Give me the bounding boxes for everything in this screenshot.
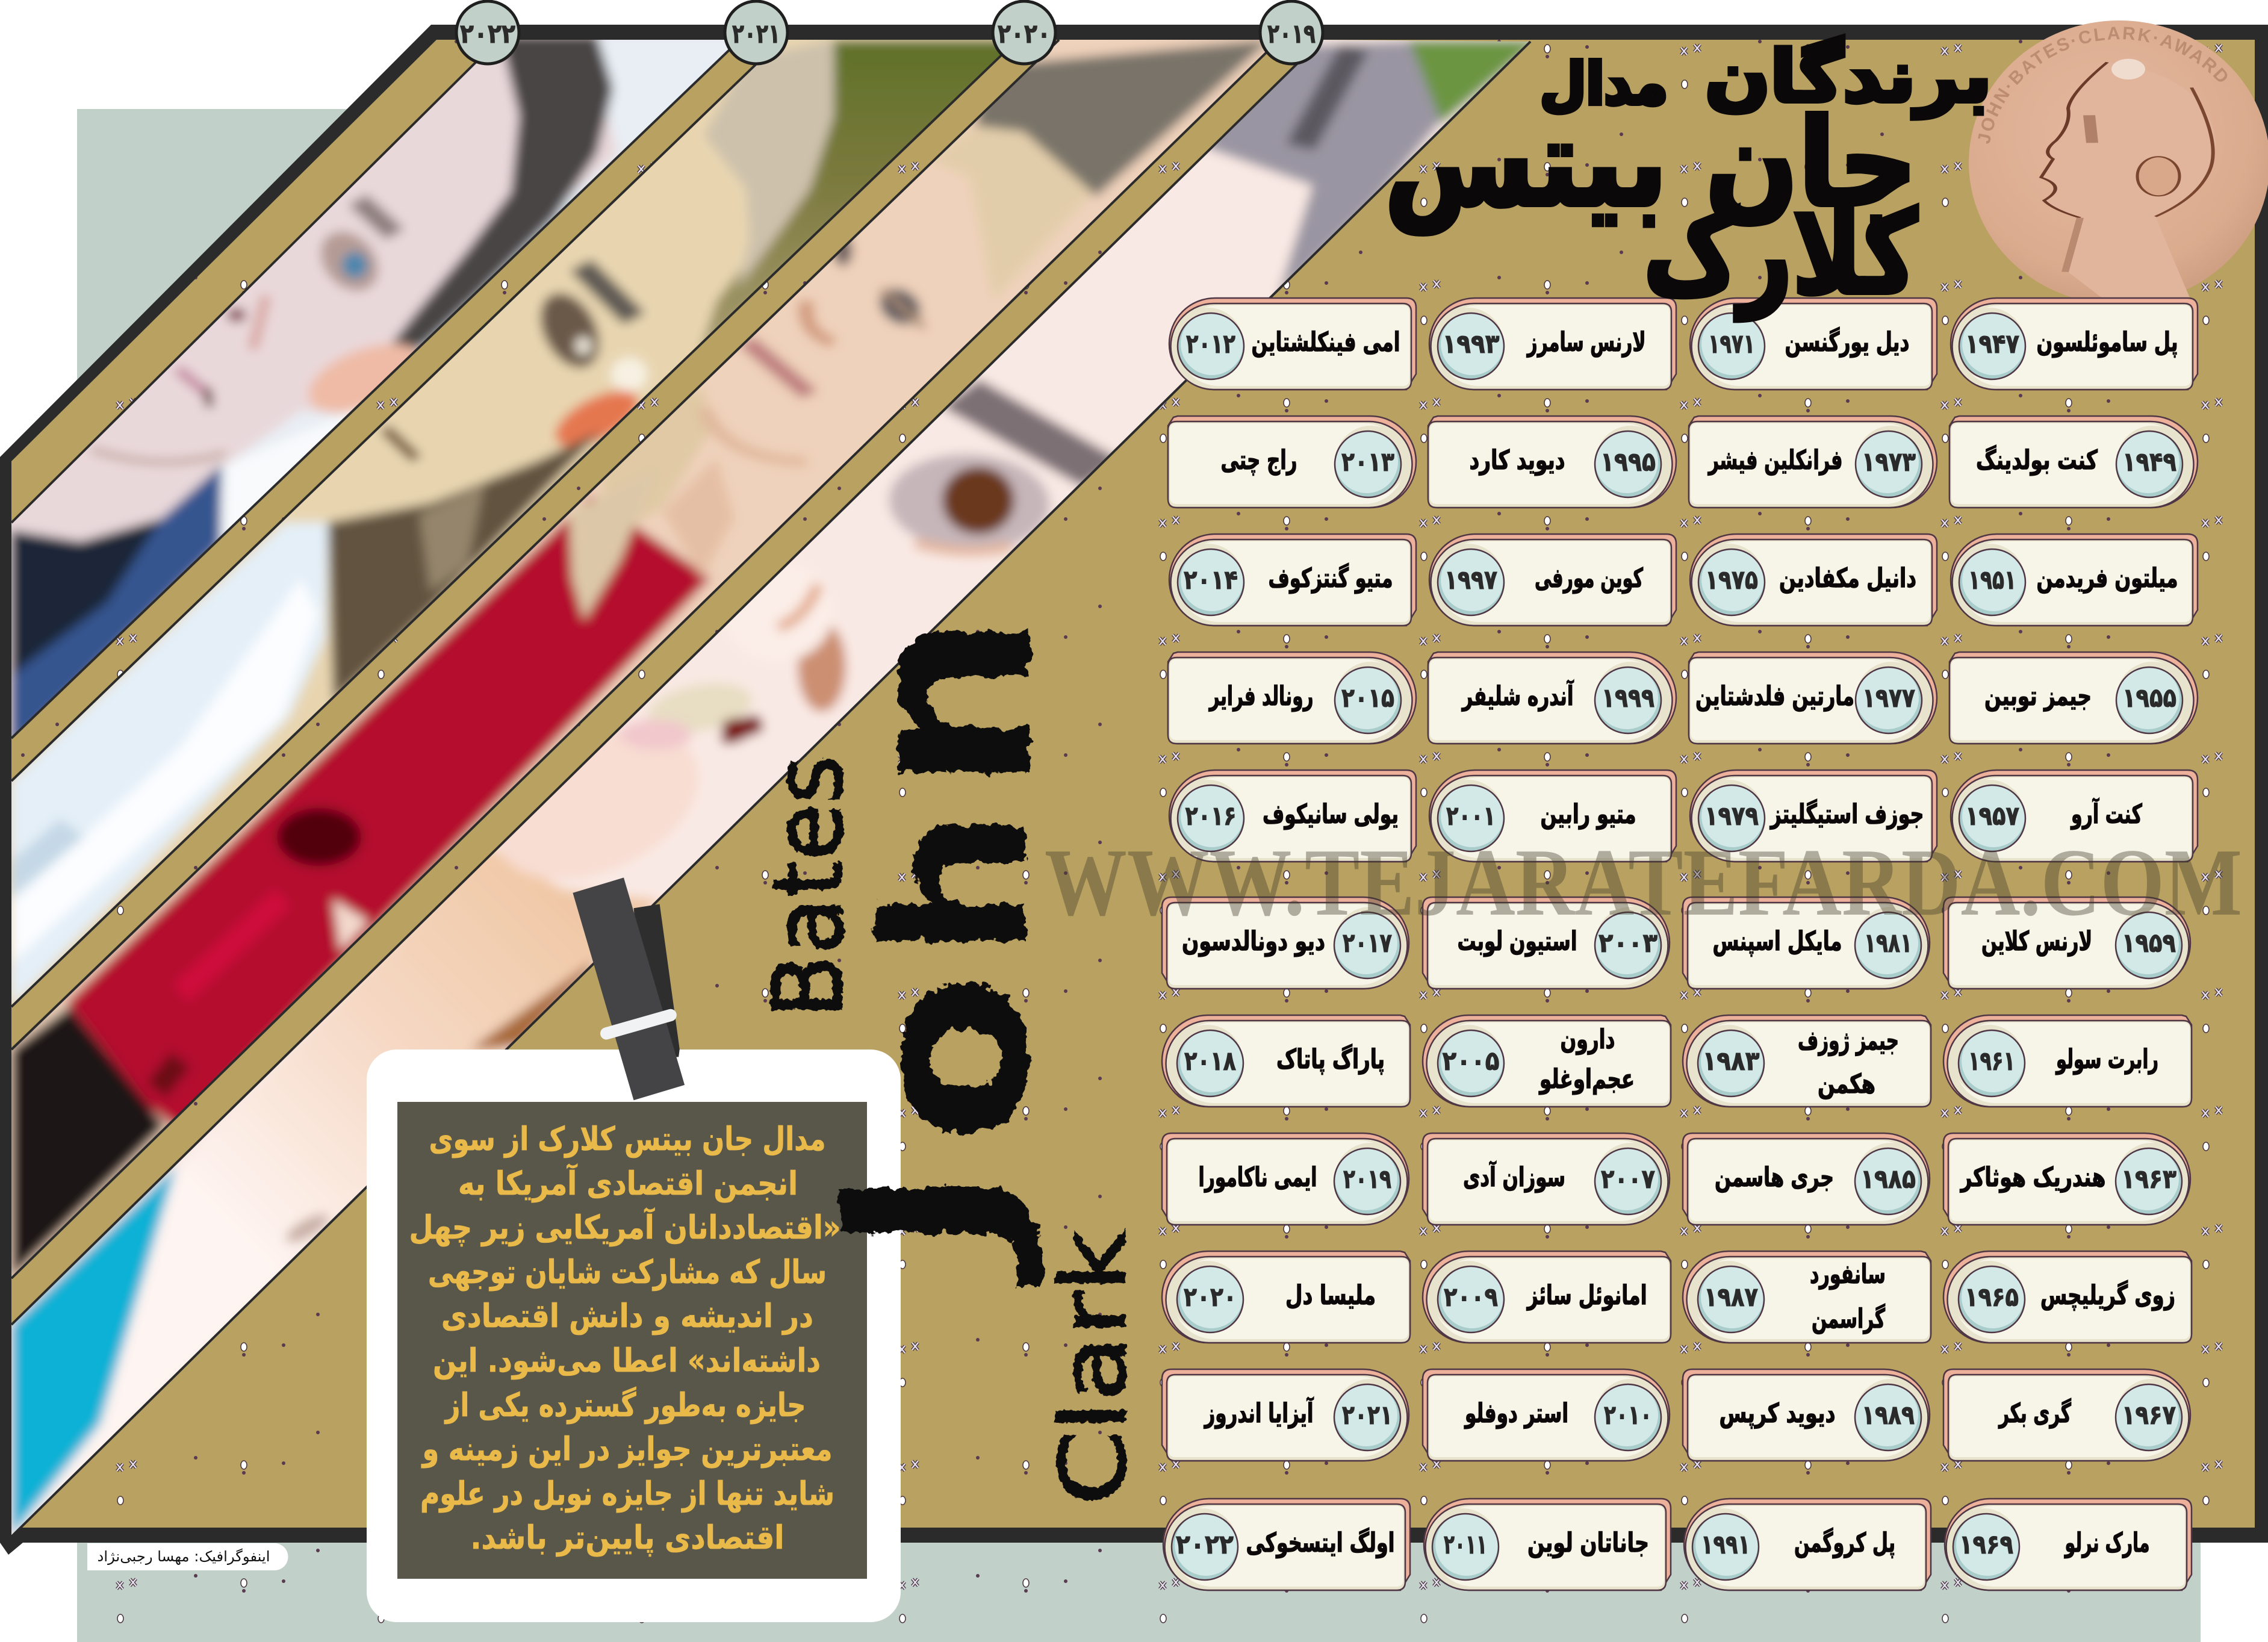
card: Dale Jorgenson 1971: ۱۹۷۱ [1708, 329, 1755, 359]
card: Kevin Murphy 1997: کوین مورفی [1535, 563, 1643, 594]
icon: paper clip holding note [573, 878, 685, 1100]
card: Martin Feldstein 1977: مارتین فلدشتاین [1695, 681, 1854, 712]
card: Gary Becker 1967: ۱۹۶۷ [2122, 1400, 2176, 1431]
card: David Kreps 1989 [1683, 1369, 1930, 1461]
card: Michael Spence 1981: ۱۹۸۱ [1864, 928, 1912, 959]
card: Michael Spence 1981 [1683, 897, 1930, 989]
card: Lawrence Klein 1959 [1943, 897, 2190, 989]
card: Dave Donaldson 2017 [1162, 897, 1409, 989]
card: Yuliy Sannikov 2016 [1169, 770, 1416, 862]
card: Jonathan Levin 2011: جاناتان لوین [1527, 1528, 1649, 1558]
photo strip: winner 2021 [11, 40, 1000, 1005]
card: Dale Jorgenson 1971: دیل یورگنسن [1785, 326, 1910, 358]
card: Emmanuel Saez 2009: امانوئل سائز [1526, 1280, 1647, 1311]
card: Raj Chetty 2013: راج چتی [1221, 445, 1297, 476]
card: Sanford Grossman 1987: گراسمن [1812, 1303, 1885, 1334]
card: Raj Chetty 2013: ۲۰۱۳ [1341, 447, 1394, 477]
card: Emi Nakamura 2019 [1162, 1133, 1409, 1225]
card: Oleg Itskhoki 2022: اولگ ایتسخوکی [1246, 1528, 1394, 1558]
note text: در اندیشه و دانش اقتصادی [441, 1297, 813, 1335]
card: Steven Levitt 2003: ۲۰۰۳ [1598, 928, 1658, 959]
card: Paul Krugman 1991: ۱۹۹۱ [1701, 1529, 1750, 1560]
title: برندگان [1705, 35, 1992, 119]
credit pill [87, 1543, 288, 1570]
card: Hendrik Houthakker 1963 [1943, 1133, 2190, 1225]
card: Lawrence Klein 1959: ۱۹۵۹ [2122, 928, 2176, 959]
card: James Joseph Heckman 1983: ۱۹۸۳ [1703, 1046, 1760, 1077]
card: Lawrence Summers 1993: لارنس سامرز [1526, 327, 1646, 358]
card: Dale Jorgenson 1971 [1690, 298, 1937, 390]
card: Lawrence Summers 1993 [1429, 298, 1676, 390]
year badge 2020 [993, 1, 1055, 64]
card: Jerry Hausman 1985 [1683, 1133, 1930, 1225]
card: Jonathan Levin 2011 [1424, 1499, 1671, 1590]
card: Kevin Murphy 1997 [1429, 534, 1676, 626]
card: Hendrik Houthakker 1963: هندریک هوثاکر [1960, 1162, 2106, 1193]
card: Lawrence Summers 1993: ۱۹۹۳ [1443, 329, 1500, 359]
photo strip: winner 2019 [0, 24, 1565, 1590]
card: James Joseph Heckman 1983: جیمز ژوزف [1798, 1025, 1899, 1056]
card: Kevin Murphy 1997: ۱۹۹۷ [1444, 565, 1497, 596]
note text: سال که مشارکت شایان توجهی [428, 1253, 827, 1291]
card: Amy Finkelstein 2012: ۲۰۱۲ [1186, 329, 1235, 359]
card: Andrei Shleifer 1999: آندره شلیفر [1461, 679, 1574, 712]
card: Joseph Stiglitz 1979 [1690, 770, 1937, 862]
title: کلارک [1644, 187, 1918, 320]
card: Esther Duflo 2010: استر دوفلو [1464, 1398, 1568, 1429]
year badge 2021 [725, 1, 788, 64]
card: Daron Acemoglu 2005: عجم‌اوغلو [1539, 1064, 1635, 1095]
card: Kenneth Arrow 1957: کنت آرو [2071, 797, 2142, 830]
card: Matthew Rabin 2001: متیو رابین [1540, 799, 1636, 830]
card: Kenneth Boulding 1949 [1950, 416, 2198, 508]
card: Joseph Stiglitz 1979: ۱۹۷۹ [1704, 801, 1759, 832]
card: Daron Acemoglu 2005: دارون [1561, 1024, 1615, 1055]
card: Sanford Grossman 1987 [1683, 1251, 1931, 1343]
card: Emmanuel Saez 2009 [1423, 1251, 1671, 1343]
card: Esther Duflo 2010: ۲۰۱۰ [1604, 1400, 1652, 1431]
card: Andrei Shleifer 1999 [1428, 652, 1676, 744]
card: Sanford Grossman 1987: ۱۹۸۷ [1704, 1282, 1758, 1313]
note text: «اقتصاددانان آمریکایی زیر چهل [409, 1207, 840, 1246]
card: Milton Friedman 1951: میلتون فریدمن [2036, 563, 2178, 594]
note text: شاید تنها از جایزه نوبل در علوم [420, 1475, 834, 1513]
card: Oleg Itskhoki 2022: ۲۰۲۲ [1176, 1529, 1234, 1560]
card: David Kreps 1989: ۱۹۸۹ [1862, 1400, 1915, 1431]
photo strip: winner 2020 [0, 24, 1325, 1289]
card: Franklin Fisher 1973: ۱۹۷۳ [1862, 447, 1916, 477]
card: Michael Spence 1981: مایکل اسپنس [1712, 926, 1842, 957]
card: Yuliy Sannikov 2016: ۲۰۱۶ [1185, 801, 1237, 832]
card: Esther Duflo 2010 [1423, 1369, 1670, 1461]
card: Gary Becker 1967: گری بکر [1998, 1398, 2071, 1429]
title: مدال [1540, 51, 1668, 117]
card: Kenneth Arrow 1957: ۱۹۵۷ [1965, 801, 2019, 832]
note text: جایزه به‌طور گسترده یکی از [444, 1386, 806, 1424]
card: Matthew Gentzkow 2014: ۲۰۱۴ [1184, 565, 1238, 596]
rotated name: Bates: Bates [752, 755, 865, 1018]
medal: John Bates Clark [1969, 20, 2268, 297]
card: Roland Fryer 2015 [1168, 652, 1416, 744]
rotated name: Clark: Clark [1042, 1230, 1146, 1505]
card: Kenneth Arrow 1957 [1951, 770, 2198, 862]
card: Susan Athey 2007: ۲۰۰۷ [1601, 1164, 1655, 1195]
card: Zvi Griliches 1965 [1943, 1251, 2192, 1343]
card: Parag Pathak 2018: ۲۰۱۸ [1184, 1046, 1236, 1077]
rotated name: John: n [810, 611, 1084, 794]
rotated name: John: J [801, 1156, 1046, 1287]
card: David Card 1995 [1428, 416, 1676, 508]
card: Andrei Shleifer 1999: ۱۹۹۹ [1602, 683, 1654, 714]
card: Emi Nakamura 2019: ایمی ناکامورا [1198, 1162, 1317, 1193]
year badge 2021: ۲۰۲۱ [732, 19, 780, 49]
card: Hendrik Houthakker 1963: ۱۹۶۳ [2121, 1164, 2176, 1195]
note text: داشته‌اند» اعطا می‌شود. این [433, 1342, 821, 1379]
card: Marc Nerlove 1969: ۱۹۶۹ [1959, 1529, 2013, 1560]
year badge 2020: ۲۰۲۰ [998, 19, 1051, 49]
card: Jonathan Levin 2011: ۲۰۱۱ [1444, 1529, 1487, 1560]
card: Matthew Gentzkow 2014: متیو گنتزکوف [1268, 562, 1393, 594]
card: Sanford Grossman 1987: سانفورد [1810, 1259, 1886, 1290]
card: Matthew Gentzkow 2014 [1169, 534, 1416, 626]
card: Daron Acemoglu 2005 [1423, 1015, 1671, 1107]
rotated name: John [801, 611, 1084, 1287]
scattered marks on sage strip [77, 1543, 2201, 1642]
card: Daron Acemoglu 2005: ۲۰۰۵ [1443, 1046, 1499, 1077]
card: Raj Chetty 2013 [1168, 416, 1416, 508]
card: Robert Solow 1961: ۱۹۶۱ [1968, 1046, 2015, 1077]
card: Lawrence Klein 1959: لارنس کلاین [1981, 926, 2092, 957]
card: James Tobin 1955 [1950, 652, 2198, 744]
note text: معتبرترین جوایز در این زمینه و [421, 1430, 832, 1468]
strip divider lines [11, 40, 1530, 1537]
card: David Kreps 1989: دیوید کرپس [1720, 1398, 1835, 1429]
card: Paul Samuelson 1947 [1951, 298, 2198, 390]
card: Daniel McFadden 1975 [1690, 534, 1937, 626]
card: Paul Krugman 1991 [1684, 1499, 1931, 1590]
note panel [367, 1050, 901, 1622]
card: Dave Donaldson 2017: دیو دونالدسون [1182, 926, 1325, 957]
card: Susan Athey 2007 [1423, 1133, 1670, 1225]
card: Kenneth Boulding 1949: ۱۹۴۹ [2122, 447, 2176, 477]
card: Susan Athey 2007: سوزان آدی [1463, 1160, 1565, 1193]
card: Emi Nakamura 2019: ۲۰۱۹ [1343, 1164, 1391, 1195]
card: Isaiah Andrews 2021: آیزایا اندروز [1204, 1396, 1314, 1429]
card: Marc Nerlove 1969 [1945, 1499, 2192, 1590]
card: Amy Finkelstein 2012: امی فینکلشتاین [1251, 327, 1400, 358]
card: David Card 1995: ۱۹۹۵ [1600, 447, 1656, 477]
card: Isaiah Andrews 2021: ۲۰۲۱ [1342, 1400, 1393, 1431]
rotated name: John: o [820, 973, 1079, 1143]
card: Joseph Stiglitz 1979: جوزف استیگلیتز [1769, 798, 1924, 830]
card: Jerry Hausman 1985: ۱۹۸۵ [1860, 1164, 1916, 1195]
card: Kenneth Boulding 1949: کنت بولدینگ [1976, 445, 2098, 476]
card: Dave Donaldson 2017: ۲۰۱۷ [1343, 928, 1392, 959]
card: James Tobin 1955: جیمز توبین [1984, 681, 2092, 712]
card: Yuliy Sannikov 2016: یولی سانیکوف [1263, 799, 1399, 830]
card: Marc Nerlove 1969: مارک نرلو [2064, 1528, 2149, 1558]
card: Matthew Rabin 2001 [1429, 770, 1676, 862]
year badge 2022 [456, 1, 519, 64]
card: Jerry Hausman 1985: جری هاسمن [1715, 1162, 1834, 1193]
title [1385, 35, 1992, 320]
year badge 2019 [1260, 1, 1323, 64]
medal: John Bates Clark: JOHN·BATES·CLARK·AWARD [1978, 26, 2228, 143]
card: Matthew Rabin 2001: ۲۰۰۱ [1446, 801, 1496, 832]
card: Milton Friedman 1951: ۱۹۵۱ [1968, 565, 2016, 596]
card: Steven Levitt 2003 [1423, 897, 1670, 989]
card: James Tobin 1955: ۱۹۵۵ [2122, 683, 2176, 714]
rotated name: John: h [840, 809, 1072, 959]
card: Paul Samuelson 1947: ۱۹۴۷ [1965, 329, 2019, 359]
card: Daniel McFadden 1975: ۱۹۷۵ [1705, 565, 1758, 596]
card: Parag Pathak 2018 [1162, 1015, 1410, 1107]
card: Franklin Fisher 1973 [1689, 416, 1937, 508]
card: Gary Becker 1967 [1943, 1369, 2190, 1461]
card: Daniel McFadden 1975: دانیل مکفادین [1779, 563, 1916, 594]
card: Martin Feldstein 1977 [1689, 652, 1937, 744]
card: Martin Feldstein 1977: ۱۹۷۷ [1862, 683, 1915, 714]
card: Steven Levitt 2003: استیون لوبت [1457, 926, 1577, 957]
card: Robert Solow 1961 [1943, 1015, 2192, 1107]
card: Milton Friedman 1951 [1951, 534, 2198, 626]
note text: انجمن اقتصادی آمریکا به [458, 1163, 798, 1202]
year badge 2019: ۲۰۱۹ [1267, 19, 1316, 49]
card: Melissa Dell 2020: ملیسا دل [1285, 1280, 1376, 1311]
card: Robert Solow 1961: رابرت سولو [2055, 1044, 2158, 1075]
card: Roland Fryer 2015: رونالد فرایر [1208, 681, 1314, 712]
card: David Card 1995: دیوید کارد [1469, 445, 1565, 476]
note text: اقتصادی پایین‌تر باشد. [471, 1519, 784, 1556]
card: Franklin Fisher 1973: فرانکلین فیشر [1707, 445, 1842, 476]
card: Zvi Griliches 1965: زوی گریلیچس [2040, 1280, 2175, 1311]
card: Parag Pathak 2018: پاراگ پاتاک [1276, 1044, 1385, 1075]
card: Paul Krugman 1991: پل کروگمن [1794, 1527, 1895, 1558]
credit pill: اینفوگرافیک: مهسا رجبی‌نژاد [98, 1548, 270, 1565]
card: Melissa Dell 2020 [1162, 1251, 1410, 1343]
card: Roland Fryer 2015: ۲۰۱۵ [1341, 683, 1394, 714]
card: Zvi Griliches 1965: ۱۹۶۵ [1965, 1282, 2019, 1313]
title: جان بیتس [1385, 93, 1917, 234]
winners table [1162, 298, 2198, 1590]
card: Oleg Itskhoki 2022 [1163, 1499, 1410, 1590]
note text: مدال جان بیتس کلارک از سوی [429, 1120, 826, 1158]
card: James Joseph Heckman 1983 [1683, 1015, 1931, 1107]
photo strip: winner 2022 [11, 40, 729, 736]
note text [409, 1120, 840, 1556]
card: Paul Samuelson 1947: پل ساموئلسون [2036, 327, 2178, 358]
card: Isaiah Andrews 2021 [1162, 1369, 1409, 1461]
card: Emmanuel Saez 2009: ۲۰۰۹ [1444, 1282, 1498, 1313]
card: Melissa Dell 2020: ۲۰۲۰ [1184, 1282, 1237, 1313]
card: Amy Finkelstein 2012 [1169, 298, 1416, 390]
card: James Joseph Heckman 1983: هکمن [1818, 1069, 1875, 1099]
year badge 2022: ۲۰۲۲ [460, 19, 515, 49]
